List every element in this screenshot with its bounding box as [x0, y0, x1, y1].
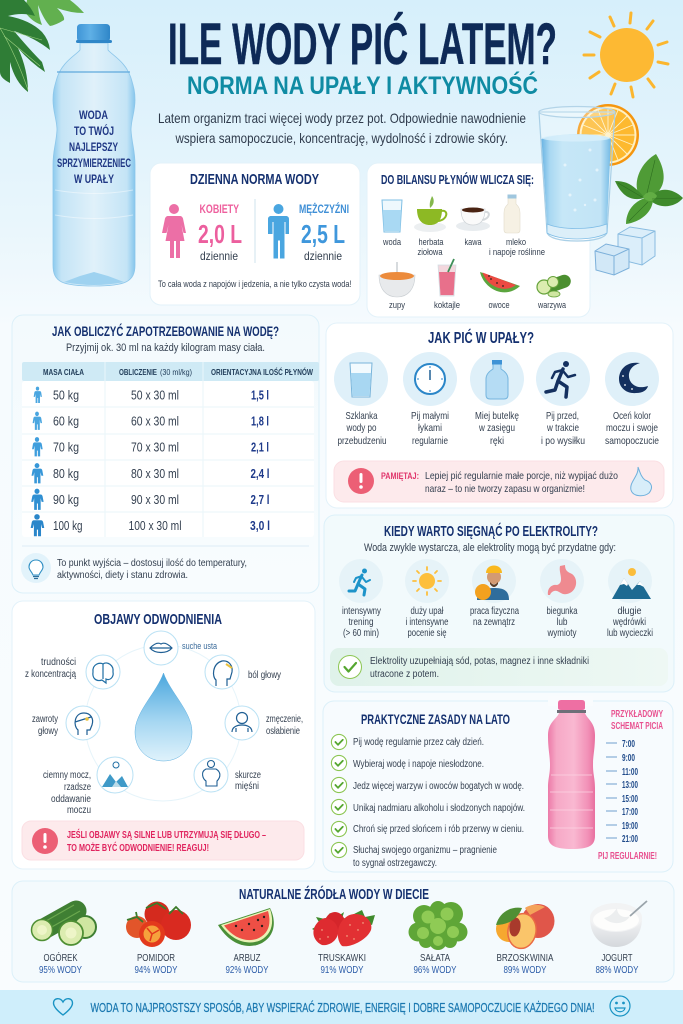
symptom: dark urine	[43, 757, 133, 816]
label: foods row: owoce	[488, 300, 510, 310]
row 50 kg: 50 x 30 ml	[131, 388, 179, 402]
item: stomach: wymioty	[547, 628, 576, 639]
row 90 kg: 90 x 30 ml	[131, 492, 179, 507]
food: tomato: 94% WODY	[134, 964, 178, 976]
subheading: Woda zwykle wystarcza, ale elektrolity mogą być przydatne gdy:	[364, 542, 616, 554]
checklist: to sygnał ostrzegawczy.	[353, 858, 437, 869]
heading: OBJAWY ODWODNIENIA	[94, 611, 222, 628]
row 70 kg: 70 kg	[53, 440, 79, 454]
panel: electrolytes	[324, 515, 674, 692]
intro text: wspiera samopoczucie, koncentrację, wydolność i zdrowie skóry.	[175, 130, 508, 146]
drinking schedule: 13:00	[622, 780, 638, 791]
icon: sun	[584, 13, 668, 97]
label: drinks row	[382, 237, 545, 257]
illustration: ice cubes	[595, 227, 655, 275]
food: lettuce: 96% WODY	[414, 964, 456, 976]
symptom: dark urine: moczu	[67, 805, 91, 816]
row 90 kg: 2,7 l	[250, 492, 270, 507]
symptom: fatigue	[225, 706, 303, 740]
illustration: glass of water	[539, 106, 615, 241]
item: stomach: lub	[556, 617, 568, 628]
item: physical work: praca fizyczna	[470, 606, 519, 617]
icon: smiley	[610, 996, 630, 1016]
icon: milk	[504, 194, 520, 233]
symptom: dark urine: rzadsze	[64, 782, 91, 793]
tip: moon: moczu i swoje	[606, 422, 658, 434]
food: tomato	[126, 902, 191, 976]
subtitle: NORMA NA UPAŁY I AKTYWNOŚĆ	[187, 70, 538, 100]
item: heat	[405, 559, 449, 639]
tip: moon: Oceń kolor	[613, 410, 651, 422]
tip: bottle	[470, 352, 524, 447]
icon: cucumber	[537, 273, 573, 297]
symptom: fatigue: zmęczenie,	[266, 714, 303, 725]
callout: remember: PAMIĘTAJ:	[381, 471, 419, 482]
tip: clock: łykami	[418, 422, 442, 434]
women norm: dziennie	[200, 249, 238, 263]
icon: smoothie	[438, 259, 456, 296]
label: foods row: zupy	[389, 300, 405, 310]
item: stomach	[540, 559, 584, 639]
tip: glass	[334, 352, 388, 447]
illustration: large water drop	[135, 673, 192, 761]
symptom: concentration	[25, 655, 120, 689]
row 100 kg: 3,0 l	[250, 518, 270, 533]
women norm	[198, 202, 242, 263]
drinking schedule	[598, 709, 663, 862]
symptom: dizziness: zawroty	[32, 714, 58, 725]
item: mountains	[607, 559, 653, 639]
checklist: Wybieraj wodę i napoje niesłodzone.	[353, 759, 484, 770]
symptom: cramps: mięśni	[235, 781, 259, 792]
food: peach: BRZOSKWINIA	[496, 952, 554, 964]
women norm: KOBIETY	[200, 202, 239, 216]
table header: MASA CIAŁA	[43, 367, 84, 377]
bottle label text: TO TWÓJ	[74, 123, 114, 138]
row 50 kg: 1,5 l	[251, 388, 269, 402]
panel: dehydration symptoms	[12, 601, 315, 869]
icon: water glass	[382, 200, 402, 232]
table header: ORIENTACYJNA ILOŚĆ PŁYNÓW	[211, 366, 314, 377]
men norm: MĘŻCZYŹNI	[299, 201, 349, 216]
food: strawberries: 91% WODY	[320, 964, 364, 976]
tip: bottle: Miej butelkę	[475, 410, 519, 422]
item: mountains: długie	[618, 606, 642, 617]
label: drinks row: kawa	[464, 237, 482, 247]
label: foods row: warzywa	[537, 300, 566, 310]
tip: runner: w trakcie	[546, 422, 579, 434]
tip: glass: Szklanka	[346, 410, 378, 422]
tip text	[57, 558, 247, 581]
panel: summer rules	[323, 696, 673, 872]
symptom: headache: ból głowy	[248, 670, 281, 681]
heading: NATURALNE ŹRÓDŁA WODY W DIECIE	[239, 885, 429, 903]
drinking schedule: 9:00	[622, 753, 635, 764]
tip: runner	[536, 352, 590, 447]
item: physical work: na zewnątrz	[473, 617, 515, 628]
icon: herbal tea	[414, 196, 446, 232]
item: heat: pocenie się	[408, 628, 447, 639]
label: drinks row: mleko	[506, 237, 526, 247]
item: stomach: biegunka	[546, 606, 578, 617]
table header: OBLICZENIE	[119, 367, 157, 377]
label: drinks row: i napoje roślinne	[489, 247, 545, 257]
item: mountains: wędrówki	[612, 617, 646, 628]
icon: watermelon slice	[480, 272, 520, 292]
symptom: dizziness	[32, 706, 100, 740]
checklist: Unikaj nadmiaru alkoholu i słodzonych napojów.	[353, 803, 525, 814]
bottle label text: W UPAŁY	[74, 172, 114, 186]
row 50 kg: 50 kg	[53, 388, 79, 402]
callout: electrolytes info: Elektrolity uzupełniają sód, potas, magnez i inne składniki	[370, 656, 589, 667]
men norm	[299, 201, 349, 263]
food: yogurt: JOGURT	[602, 952, 633, 964]
tip: clock: Pij małymi	[411, 410, 449, 422]
row 60 kg: 60 kg	[53, 414, 79, 428]
tip: glass: wody po	[346, 422, 377, 434]
symptom: concentration: z koncentracją	[25, 669, 76, 680]
symptom: concentration: trudności	[41, 657, 76, 668]
item: training	[339, 559, 383, 639]
panel: natural water sources	[12, 881, 674, 982]
row 90 kg: 90 kg	[53, 492, 79, 507]
bottle label text: NAJLEPSZY	[69, 140, 118, 154]
row 100 kg: 100 x 30 ml	[128, 518, 182, 533]
men norm: 2,5 L	[301, 219, 345, 249]
illustration: water bottle with text	[53, 24, 135, 286]
checklist: Chroń się przed słońcem i rób przerwy w cieniu.	[353, 824, 524, 835]
tip: runner: i po wysiłku	[541, 435, 585, 447]
callout: remember: Lepiej pić regularnie małe porcje, niż wypijać dużo	[425, 470, 618, 482]
callout: warning	[22, 821, 304, 860]
row 80 kg: 80 x 30 ml	[131, 466, 179, 481]
label: drinks row: ziołowa	[418, 247, 442, 257]
row 60 kg: 1,8 l	[251, 414, 269, 428]
icon: man	[268, 204, 289, 258]
item: mountains: lub wycieczki	[607, 628, 653, 639]
food: watermelon	[218, 908, 274, 976]
food: cucumber	[32, 905, 96, 976]
tip: moon	[605, 352, 659, 447]
food: strawberries: TRUSKAWKI	[318, 952, 366, 964]
food: strawberries	[312, 910, 375, 976]
icon: woman	[162, 204, 186, 258]
illustration: orange slice	[577, 104, 639, 166]
drinking schedule: 15:00	[622, 794, 638, 805]
icon: coffee	[456, 208, 490, 231]
row 80 kg	[32, 463, 270, 483]
item: heat: duży upał	[410, 606, 444, 617]
row 80 kg: 2,4 l	[250, 466, 270, 481]
symptom: headache	[205, 655, 281, 689]
row 60 kg	[33, 412, 269, 430]
checklist	[331, 734, 525, 869]
label: foods row	[389, 300, 566, 310]
symptom: fatigue: osłabienie	[266, 726, 300, 737]
tip: runner: Pij przed,	[546, 410, 579, 422]
bottle label text	[57, 108, 131, 186]
item: training: (> 60 min)	[343, 628, 379, 639]
drinking schedule: 11:00	[622, 767, 638, 778]
food: cucumber: OGÓREK	[44, 951, 78, 964]
symptom: cramps: skurcze	[235, 770, 261, 781]
heading: JAK PIĆ W UPAŁY?	[428, 328, 534, 347]
food: tomato: POMIDOR	[137, 952, 175, 964]
row 70 kg	[32, 437, 269, 456]
symptom: dry mouth: suche usta	[182, 641, 217, 651]
item: training: intensywny	[342, 606, 381, 617]
checklist: Słuchaj swojego organizmu – pragnienie	[353, 845, 497, 856]
drinking schedule: 19:00	[622, 821, 638, 832]
tip text: aktywności, diety i stanu zdrowia.	[57, 570, 188, 581]
table header	[43, 366, 314, 377]
intro text	[158, 110, 526, 146]
callout: warning: TO MOŻE BYĆ ODWODNIENIE! REAGUJ!	[67, 841, 209, 854]
item: physical work	[470, 559, 519, 628]
heading: PRAKTYCZNE ZASADY NA LATO	[361, 711, 510, 727]
tip: glass: przebudzeniu	[338, 435, 387, 447]
heading: DZIENNA NORMA WODY	[190, 171, 319, 188]
men norm: dziennie	[304, 249, 342, 263]
bottle label text: SPRZYMIERZENIEC	[57, 156, 131, 170]
tip: bottle: w zasięgu	[478, 422, 515, 434]
row 70 kg: 2,1 l	[251, 440, 269, 454]
panel: daily norm	[150, 163, 360, 305]
icon: palm leaves	[0, 0, 84, 92]
food: peach	[496, 904, 554, 976]
symptom: dizziness: głowy	[38, 726, 58, 737]
bottle label text: WODA	[79, 108, 108, 122]
tip: clock	[403, 352, 457, 447]
illustration: pink bottle	[548, 700, 595, 849]
table header: (30 ml/kg)	[160, 368, 192, 377]
subheading: Przyjmij ok. 30 ml na każdy kilogram masy ciała.	[66, 342, 265, 354]
panel: water requirement calculator	[12, 315, 319, 593]
checklist: Pij wodę regularnie przez cały dzień.	[353, 737, 484, 748]
symptom: dark urine: oddawanie	[51, 794, 91, 805]
panel: how to drink in heat	[326, 323, 673, 508]
women norm: 2,0 L	[198, 219, 242, 249]
intro text: Latem organizm traci więcej wody przez pot. Odpowiednie nawodnienie	[158, 110, 526, 126]
food: lettuce	[408, 901, 468, 976]
tip: bottle: ręki	[490, 435, 504, 447]
checklist: Jedz więcej warzyw i owoców bogatych w wodę.	[353, 781, 524, 792]
item: training: trening	[348, 617, 374, 628]
row 90 kg	[31, 489, 269, 510]
tip: moon: samopoczucie	[605, 435, 659, 447]
item: heat: i intensywne	[406, 617, 449, 628]
callout: electrolytes info	[330, 648, 668, 686]
callout: remember	[334, 461, 664, 502]
table	[22, 362, 319, 537]
label: foods row: koktajle	[434, 300, 460, 310]
food: peach: 89% WODY	[504, 964, 546, 976]
panel: fluid balance	[367, 163, 590, 317]
row 60 kg: 60 x 30 ml	[131, 414, 179, 428]
illustration: mint leaves	[615, 154, 683, 224]
tip text: To punkt wyjścia – dostosuj ilość do temperatury,	[57, 558, 247, 569]
drinking schedule: 17:00	[622, 807, 638, 818]
note: To cała woda z napojów i jedzenia, a nie tylko czysta woda!	[158, 279, 352, 290]
row 70 kg: 70 x 30 ml	[131, 440, 179, 454]
heading: JAK OBLICZYĆ ZAPOTRZEBOWANIE NA WODĘ?	[52, 322, 279, 339]
row 100 kg: 100 kg	[53, 518, 82, 533]
label: drinks row: woda	[382, 237, 401, 247]
symptom: dark urine: ciemny mocz,	[43, 770, 91, 781]
food: watermelon: 92% WODY	[226, 964, 268, 976]
symptom: cramps	[194, 758, 261, 792]
food: yogurt: 88% WODY	[596, 964, 638, 976]
callout: electrolytes info: utracone z potem.	[370, 669, 439, 680]
icon: soup	[379, 262, 415, 297]
drinking schedule: PIJ REGULARNIE!	[598, 851, 657, 862]
label: drinks row: herbata	[418, 237, 444, 247]
food: yogurt	[590, 901, 647, 976]
food: lettuce: SAŁATA	[420, 952, 450, 964]
row 80 kg: 80 kg	[53, 466, 79, 481]
drinking schedule: 7:00	[622, 739, 635, 750]
row 100 kg	[31, 514, 270, 536]
icon: heart	[54, 999, 72, 1015]
drinking schedule: 21:00	[622, 834, 638, 845]
icon: light bulb	[21, 553, 51, 583]
food: watermelon: ARBUZ	[234, 952, 261, 964]
footer band	[0, 990, 683, 1024]
food: cucumber: 95% WODY	[39, 964, 82, 976]
symptom: dry mouth	[144, 631, 217, 665]
callout: remember: naraz – to nie tworzy zapasu w organizmie!	[425, 483, 585, 495]
heading: DO BILANSU PŁYNÓW WLICZA SIĘ:	[381, 172, 534, 187]
row 50 kg	[34, 387, 269, 403]
tip: clock: regularnie	[412, 435, 448, 447]
callout: warning: JEŚLI OBJAWY SĄ SILNE LUB UTRZYMUJĄ SIĘ DŁUGO –	[67, 828, 266, 841]
